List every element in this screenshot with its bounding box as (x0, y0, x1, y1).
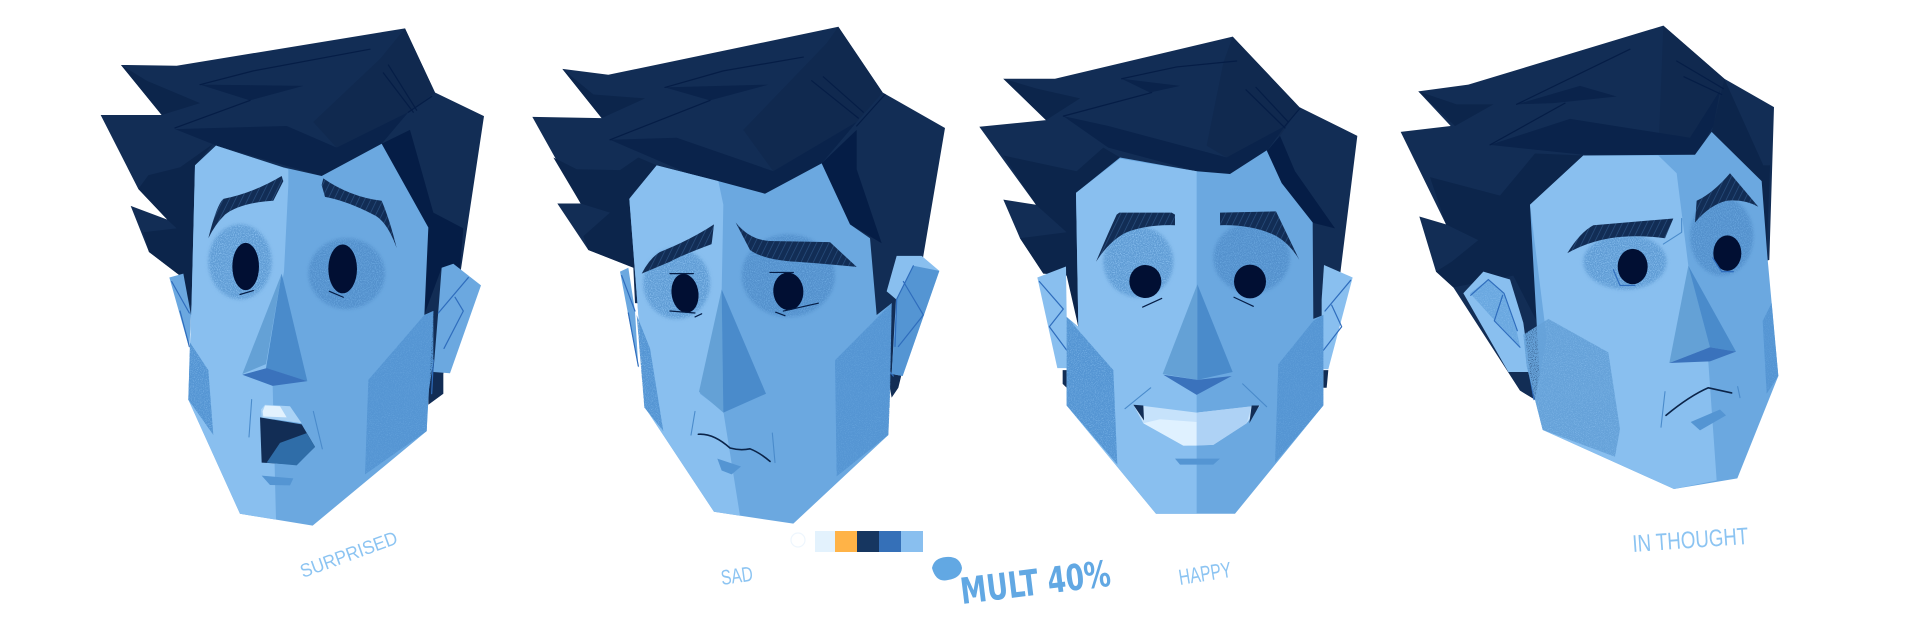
eyes (1129, 265, 1266, 307)
eye shadows (208, 224, 385, 309)
mouth (1661, 387, 1740, 430)
eye shadows (1103, 222, 1290, 297)
eyebrows (642, 222, 857, 274)
colour palette (791, 531, 923, 552)
eye shadows (1583, 197, 1753, 289)
hair (532, 27, 945, 398)
eyes (232, 243, 357, 297)
head: sad (532, 27, 945, 524)
eyebrows (1096, 211, 1299, 262)
nose (1163, 284, 1233, 395)
eyes (668, 268, 818, 317)
mouth (1125, 384, 1267, 465)
hair (979, 37, 1357, 327)
head: surprised (101, 28, 484, 526)
face skin (188, 144, 433, 526)
face skin (1523, 132, 1778, 489)
face skin (629, 163, 892, 524)
eye shadows (643, 234, 835, 319)
face skin (1067, 150, 1323, 514)
hair (1401, 26, 1774, 400)
mouth (249, 400, 322, 485)
head: happy (979, 37, 1357, 514)
label: surprised: SURPRISED (298, 528, 401, 583)
eyes (1613, 235, 1741, 285)
hair (101, 28, 484, 405)
eyebrows (1567, 173, 1758, 253)
nose (242, 274, 307, 386)
mouth (691, 411, 775, 474)
ears (620, 256, 939, 376)
label: happy: HAPPY (1177, 557, 1233, 590)
ears (1037, 265, 1353, 388)
ears (169, 264, 481, 394)
nose (699, 289, 766, 413)
nose (1669, 266, 1736, 363)
ear (1463, 272, 1535, 400)
head: in thought (1401, 26, 1778, 489)
icon: paint blob (932, 557, 962, 580)
note: mult 40%: MULT 40% (958, 554, 1113, 613)
eyebrows (208, 176, 397, 248)
label: in thought: IN THOUGHT (1632, 523, 1749, 558)
label: sad: SAD (719, 563, 754, 590)
